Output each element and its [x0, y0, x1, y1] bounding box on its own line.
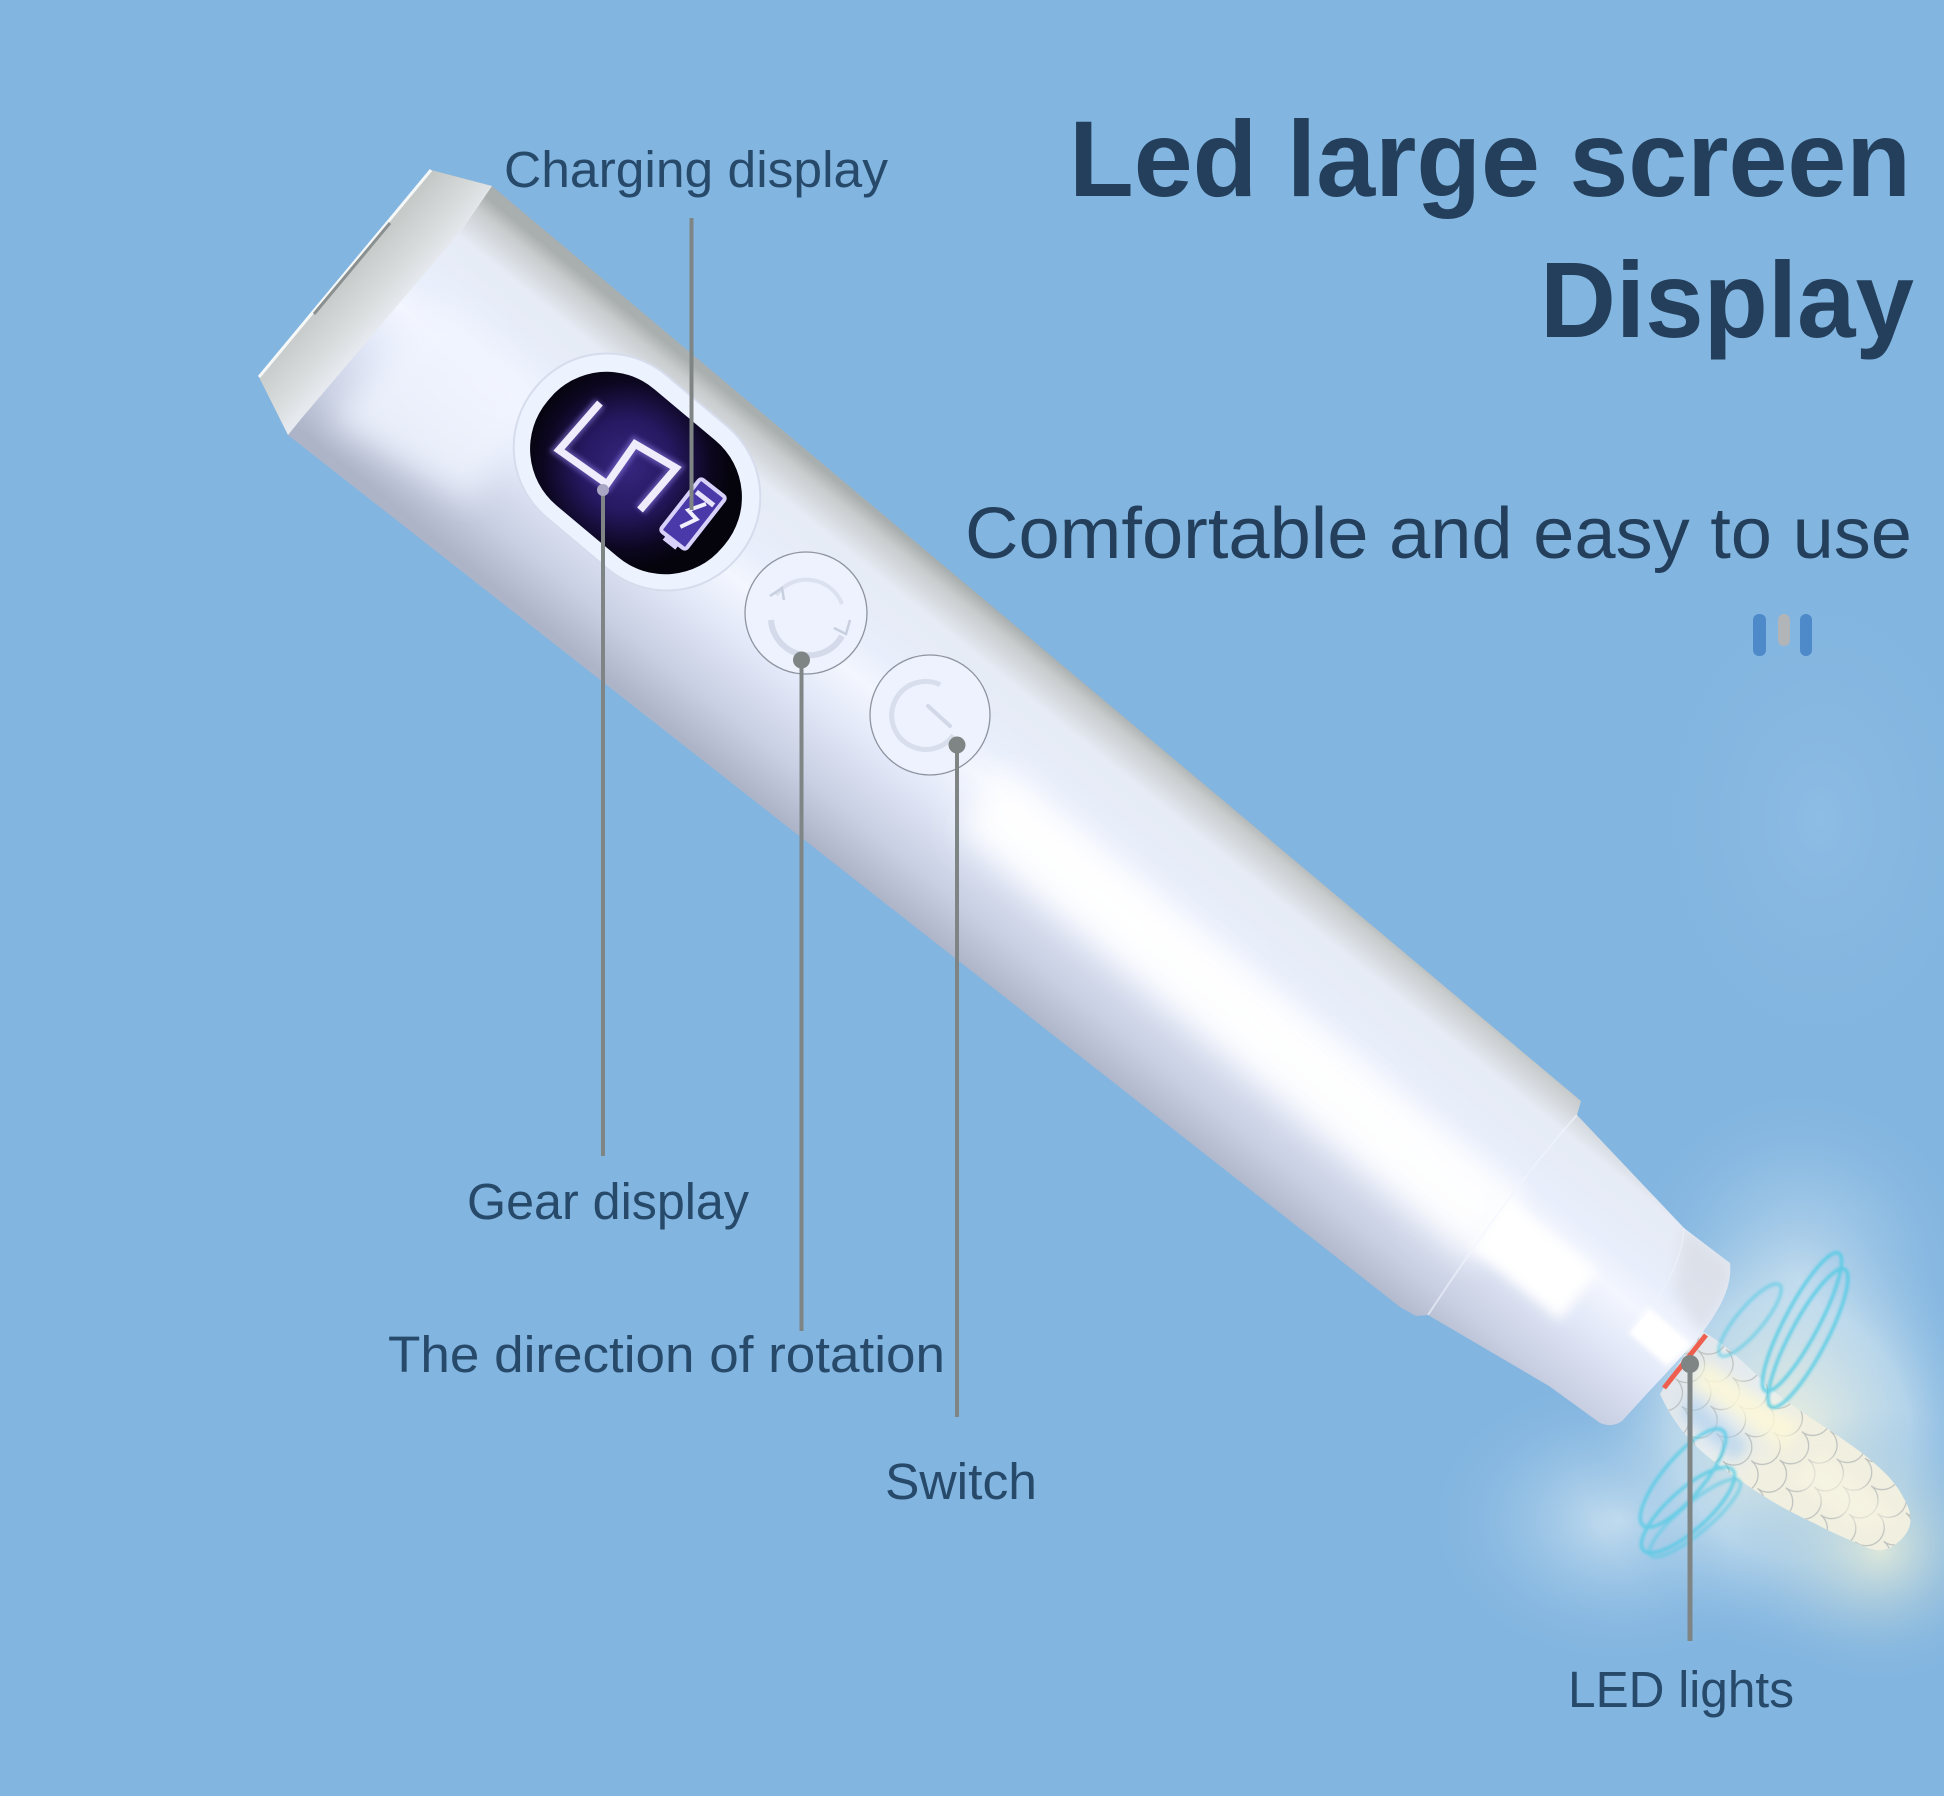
callout: direction of rotation: The direction of rotation	[388, 1326, 945, 1383]
callout: switch	[885, 736, 1037, 1510]
gear digit 5	[559, 403, 676, 510]
blue rotation swirls, upper	[1710, 1245, 1861, 1415]
callout: gear display: Gear display	[467, 1173, 749, 1230]
body highlights	[330, 290, 1730, 1366]
callout: LED lights	[1568, 1355, 1794, 1718]
light glow around drill bit	[1420, 1080, 1944, 1729]
title: Display	[1540, 239, 1914, 360]
subtitle: Comfortable and easy to use	[965, 494, 1912, 574]
callout: charging display: Charging display	[504, 141, 888, 198]
end cap	[259, 170, 492, 435]
rotation direction button	[745, 552, 867, 674]
battery charging icon	[656, 478, 726, 555]
switch button	[870, 655, 990, 775]
title	[1069, 98, 1914, 360]
callout: LED lights: LED lights	[1568, 1661, 1794, 1718]
callout: switch: Switch	[885, 1453, 1037, 1510]
callout: direction of rotation	[388, 652, 945, 1383]
faint background glow	[1630, 550, 1944, 1090]
illustration: pen device	[259, 170, 1911, 1567]
blue rotation swirls, lower	[1628, 1418, 1749, 1567]
screen frame	[476, 316, 798, 628]
callout: gear display	[467, 484, 749, 1230]
title: Led large screen	[1069, 98, 1911, 219]
LED red light	[1664, 1335, 1706, 1388]
drill bit with scale texture	[1660, 1330, 1911, 1550]
pen body	[259, 170, 1730, 1425]
LED screen	[500, 342, 772, 604]
decorative bars icon	[1753, 614, 1812, 656]
